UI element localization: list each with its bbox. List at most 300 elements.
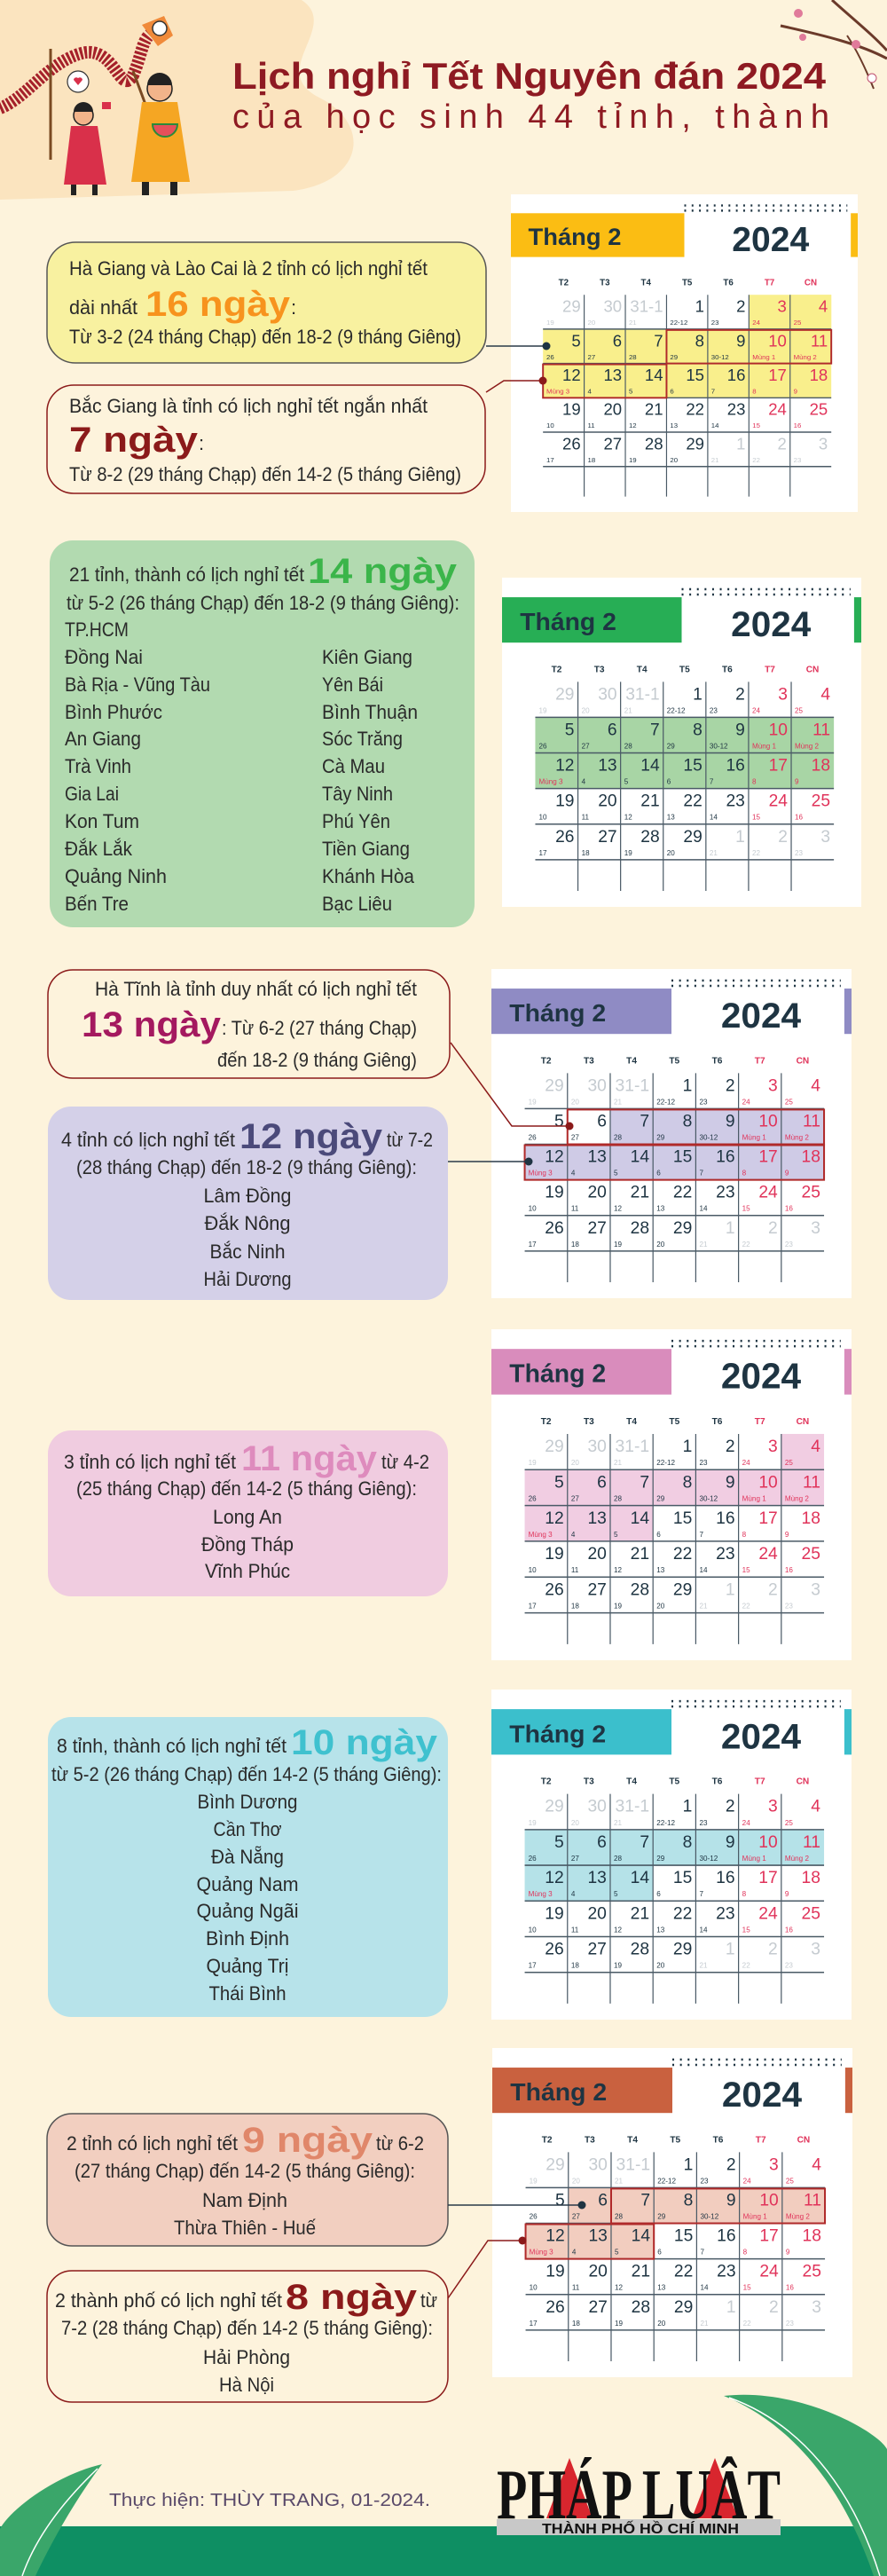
calendar 6: 29 <box>546 2155 565 2174</box>
calendar 3: T2 <box>541 1056 552 1066</box>
calendar 1: 22-12 <box>670 319 687 327</box>
calendar 2: 4 <box>582 778 586 786</box>
calendar 4: 2 <box>768 1580 778 1599</box>
calendar 1: 9 <box>794 388 797 395</box>
calendar 2: 28 <box>640 828 660 847</box>
calendar 6: 22 <box>743 2320 751 2328</box>
calendar 1: 5 <box>571 331 581 350</box>
calendar 5: 26 <box>529 1855 537 1863</box>
calendar 4: 2024 <box>721 1356 802 1397</box>
calendar 5: 9 <box>726 1833 735 1852</box>
icon: blossom branch <box>781 0 887 89</box>
calendar 5: 4 <box>811 1798 820 1816</box>
calendar 3: 11 <box>571 1205 579 1213</box>
calendar 1: 29 <box>686 434 704 453</box>
calendar 6: 19 <box>546 2263 565 2281</box>
calendar 1: 8 <box>752 388 757 395</box>
callout: 16 ngày <box>47 242 486 363</box>
callout: 13 ngày: : Từ 6-2 (27 tháng Chạp) <box>222 1017 417 1039</box>
calendar 4: 10 <box>529 1566 537 1574</box>
calendar 5: Mùng 2 <box>785 1855 809 1863</box>
calendar 4: 10 <box>758 1473 778 1492</box>
calendar 3: 24 <box>758 1184 778 1202</box>
calendar 3: 27 <box>587 1219 607 1238</box>
calendar 4: 6 <box>597 1473 607 1492</box>
calendar 4: CN <box>797 1417 809 1427</box>
calendar 3: 23 <box>785 1241 793 1249</box>
calendar 2: CN <box>806 665 819 674</box>
calendar 2: 22 <box>683 792 703 811</box>
calendar 3: 5 <box>554 1113 564 1130</box>
panel: 12 ngày: Bắc Ninh <box>209 1241 286 1263</box>
callout: 7 ngày: : <box>199 432 204 454</box>
panel: 9 ngày: (27 tháng Chạp) đến 14-2 (5 tháng Giêng): <box>75 2160 415 2182</box>
panel: 10 ngày <box>48 1717 448 2017</box>
calendar 5: 14 <box>699 1926 708 1934</box>
calendar 5: 4 <box>571 1890 576 1898</box>
calendar 4: 4 <box>571 1531 576 1539</box>
calendar 4: 13 <box>587 1509 607 1528</box>
calendar 1: 29 <box>562 297 581 316</box>
calendar 5: 1 <box>683 1798 692 1816</box>
calendar 5: T4 <box>626 1777 637 1787</box>
calendar 1: 22 <box>752 456 760 464</box>
calendar 1: 28 <box>629 353 637 361</box>
calendar 4: 17 <box>758 1509 778 1528</box>
calendar 3: 19 <box>545 1184 564 1202</box>
calendar 1: 17 <box>768 366 787 384</box>
calendar 3: 14 <box>699 1205 708 1213</box>
panel: 14 ngày: 14 ngày <box>308 552 458 591</box>
calendar 2: 11 <box>812 721 830 739</box>
calendar 1: Mùng 3 <box>546 388 569 395</box>
calendar 1: 18 <box>810 366 828 384</box>
calendar 4: 18 <box>802 1509 820 1528</box>
calendar 6: 16 <box>717 2227 736 2246</box>
calendar 3: 10 <box>758 1113 778 1130</box>
calendar 5: 2 <box>768 1941 778 1959</box>
calendar 3: 23 <box>716 1184 735 1202</box>
calendar 3: 22-12 <box>656 1098 676 1106</box>
panel: 10 ngày: Quảng Ngãi <box>197 1900 298 1922</box>
calendar 4: 19 <box>529 1459 537 1467</box>
calendar 4: 28 <box>614 1495 623 1503</box>
calendar 1: 26 <box>546 353 554 361</box>
calendar 2: 20 <box>598 792 617 811</box>
calendar 6: 10 <box>759 2192 779 2210</box>
calendar 6: 15 <box>674 2227 693 2246</box>
calendar 3: 7 <box>699 1170 703 1178</box>
calendar 3: Mùng 1 <box>742 1134 766 1142</box>
calendar 6: 20 <box>588 2263 608 2281</box>
panel: 12 ngày: Hải Dương <box>204 1268 291 1290</box>
calendar 1: 14 <box>645 366 663 384</box>
calendar 5: 18 <box>802 1869 820 1887</box>
calendar 1: Mùng 1 <box>752 353 775 361</box>
calendar 1: 4 <box>588 388 593 395</box>
calendar 5: 27 <box>571 1855 579 1863</box>
calendar 3: 20 <box>587 1184 607 1202</box>
panel: 12 ngày: 4 tỉnh có lịch nghỉ tết <box>61 1129 235 1151</box>
icon: left leaf <box>0 2464 102 2576</box>
calendar 1: 21 <box>711 456 718 464</box>
calendar 6: Mùng 3 <box>530 2249 553 2257</box>
calendar 6: 21 <box>700 2320 709 2328</box>
calendar 2: 13 <box>598 757 617 776</box>
calendar 5: 19 <box>529 1819 537 1827</box>
panel: 9 ngày: từ 6-2 <box>376 2132 424 2155</box>
calendar 6: 9 <box>726 2192 736 2210</box>
panel: 14 ngày: Khánh Hòa <box>322 865 415 887</box>
calendar 6: 2024 <box>722 2074 803 2115</box>
calendar 3: 25 <box>785 1098 793 1106</box>
panel: 9 ngày: Thừa Thiên - Huế <box>174 2217 316 2239</box>
calendar 5: T5 <box>669 1777 680 1787</box>
calendar 6: 28 <box>632 2298 650 2317</box>
calendar 5: 31-1 <box>616 1798 649 1816</box>
calendar 1: T2 <box>559 279 569 288</box>
calendar 2: 15 <box>752 814 761 822</box>
calendar 6: 31-1 <box>616 2155 650 2174</box>
panel: 12 ngày: Lâm Đồng <box>204 1185 291 1207</box>
panel: 10 ngày: Thái Bình <box>209 1982 286 2005</box>
calendar 2: 6 <box>667 778 671 786</box>
calendar 2: T2 <box>552 665 562 674</box>
calendar 5: 13 <box>656 1926 665 1934</box>
calendar 3: 15 <box>673 1148 692 1167</box>
calendar 1: 1 <box>736 434 745 453</box>
arrow: connector 9 ngày <box>448 2201 585 2210</box>
calendar 6: 22-12 <box>657 2177 677 2185</box>
calendar 5: 7 <box>699 1890 703 1898</box>
calendar 4: 7 <box>640 1473 649 1492</box>
calendar 4: 29 <box>673 1580 692 1599</box>
calendar 6: 21 <box>632 2263 650 2281</box>
calendar 3: 2 <box>768 1219 778 1238</box>
calendar 2: 1 <box>693 685 703 704</box>
calendar 6: 15 <box>743 2284 751 2292</box>
calendar 1: Tháng 2 <box>529 223 621 250</box>
panel: 10 ngày: Đà Nẵng <box>211 1846 284 1868</box>
calendar 1: 22 <box>686 400 704 419</box>
arrow: connector 12 ngày <box>448 1157 532 1166</box>
calendar 4: 8 <box>742 1531 747 1539</box>
calendar 6: 13 <box>588 2227 608 2246</box>
calendar 5: T6 <box>712 1777 723 1787</box>
calendar 1: 2024 <box>732 221 810 259</box>
calendar 3: T5 <box>669 1056 680 1066</box>
panel: 9 ngày: 2 tỉnh có lịch nghỉ tết <box>67 2132 238 2155</box>
calendar 5: 23 <box>716 1904 735 1923</box>
calendar 5: 11 <box>803 1833 820 1852</box>
panel: 14 ngày: Tiền Giang <box>322 838 410 860</box>
calendar 5: 30-12 <box>699 1855 718 1863</box>
calendar 6: Tháng 2 <box>510 2077 607 2106</box>
calendar 1: 24 <box>768 400 787 419</box>
calendar 3: 10 <box>529 1205 537 1213</box>
calendar 5: 7 <box>640 1833 649 1852</box>
panel: 14 ngày: Bến Tre <box>65 893 129 915</box>
calendar 4: 6 <box>656 1531 661 1539</box>
calendar 1: 2 <box>736 297 745 316</box>
calendar 1: 14 <box>711 421 719 429</box>
panel: 14 ngày: Phú Yên <box>322 810 390 832</box>
calendar 1: 18 <box>588 456 595 464</box>
panel: 14 ngày: Quảng Ninh <box>65 865 167 887</box>
logo: Pháp Luật: THÀNH PHỐ HỒ CHÍ MINH <box>542 2519 739 2537</box>
calendar 4: 21 <box>631 1545 649 1564</box>
calendar 2: 12 <box>624 814 632 822</box>
calendar 5: 19 <box>614 1962 623 1970</box>
calendar 6 <box>492 2048 852 2377</box>
calendar 1: 29 <box>670 353 678 361</box>
calendar 2: 5 <box>565 721 575 739</box>
calendar 4: 23 <box>785 1603 793 1611</box>
calendar 2: T7 <box>765 665 775 674</box>
calendar 5: 12 <box>545 1869 564 1887</box>
calendar 5: 8 <box>742 1890 747 1898</box>
calendar 1: T5 <box>682 279 693 288</box>
calendar 5: 1 <box>726 1941 735 1959</box>
calendar 6: 21 <box>615 2177 624 2185</box>
calendar 3: 29 <box>545 1076 564 1095</box>
calendar 2: 21 <box>710 849 718 857</box>
calendar 6: 11 <box>804 2192 821 2210</box>
calendar 6: 17 <box>530 2320 538 2328</box>
calendar 4: T3 <box>584 1417 594 1427</box>
calendar 2: Mùng 3 <box>539 778 563 786</box>
callout: 7 ngày <box>47 385 485 493</box>
callout: 16 ngày: Từ 3-2 (24 tháng Chạp) đến 18-2 (9 tháng Giêng) <box>69 326 461 348</box>
calendar 6: 24 <box>743 2177 751 2185</box>
calendar 1: 24 <box>752 319 761 327</box>
calendar 5: 10 <box>529 1926 537 1934</box>
calendar 6: 5 <box>555 2192 565 2210</box>
calendar 6: 5 <box>615 2249 619 2257</box>
calendar 3: 17 <box>758 1148 778 1167</box>
calendar 4: 23 <box>699 1459 708 1467</box>
calendar 6: 24 <box>759 2263 779 2281</box>
arrow: connector 8 ngày <box>448 2236 527 2298</box>
panel: 14 ngày: Cà Mau <box>322 755 385 777</box>
calendar 3: 29 <box>673 1219 692 1238</box>
panel: 10 ngày: Bình Dương <box>197 1791 298 1813</box>
calendar 3: T6 <box>712 1056 723 1066</box>
calendar 1: 6 <box>670 388 674 395</box>
calendar 5: 18 <box>571 1962 579 1970</box>
calendar 1: 21 <box>629 319 637 327</box>
calendar 6: 19 <box>530 2177 538 2185</box>
calendar 2: 29 <box>555 685 575 704</box>
calendar 3: 24 <box>742 1098 750 1106</box>
calendar 3: 4 <box>571 1170 576 1178</box>
calendar 4: 20 <box>587 1545 607 1564</box>
calendar 2: 23 <box>726 792 745 811</box>
panel: 12 ngày: (28 tháng Chạp) đến 18-2 (9 tháng Giêng): <box>76 1156 417 1178</box>
calendar 5: 19 <box>545 1904 564 1923</box>
calendar 4: Mùng 3 <box>529 1531 553 1539</box>
callout: 16 ngày: Hà Giang và Lào Cai là 2 tỉnh có lịch nghỉ tết <box>69 257 428 280</box>
calendar 2: T4 <box>637 665 648 674</box>
panel: 14 ngày: An Giang <box>65 728 141 750</box>
calendar 1: 26 <box>562 434 581 453</box>
calendar 6: 10 <box>530 2284 538 2292</box>
calendar 3: 21 <box>614 1098 623 1106</box>
calendar 3: 12 <box>545 1148 564 1167</box>
panel: 10 ngày: 8 tỉnh, thành có lịch nghỉ tết <box>57 1735 287 1757</box>
panel: 12 ngày: 12 ngày <box>239 1117 383 1156</box>
calendar 5: 16 <box>785 1926 793 1934</box>
calendar 4: 14 <box>631 1509 649 1528</box>
calendar 4: Mùng 2 <box>785 1495 809 1503</box>
calendar 2: 30-12 <box>710 743 728 751</box>
calendar 2: 29 <box>667 743 675 751</box>
calendar 3: 18 <box>571 1241 579 1249</box>
calendar 6: 7 <box>640 2192 650 2210</box>
callout: 16 ngày: : <box>291 296 296 319</box>
calendar 2: 24 <box>752 706 761 714</box>
calendar 5: 21 <box>631 1904 649 1923</box>
calendar 4: 29 <box>656 1495 665 1503</box>
calendar 1: 25 <box>794 319 801 327</box>
calendar 2: 20 <box>582 706 590 714</box>
arrow: connector 7 ngày <box>486 376 546 392</box>
panel: 14 ngày <box>50 540 475 927</box>
calendar 2: 28 <box>624 743 632 751</box>
calendar 6: 11 <box>572 2284 580 2292</box>
calendar 3: 17 <box>529 1241 537 1249</box>
calendar 5: 2 <box>726 1798 735 1816</box>
footer green band <box>0 2526 887 2576</box>
calendar 2: 27 <box>582 743 590 751</box>
calendar 6: 18 <box>572 2320 580 2328</box>
calendar 5: 29 <box>545 1798 564 1816</box>
calendar 4: 16 <box>716 1509 735 1528</box>
calendar 3: CN <box>797 1056 809 1066</box>
calendar 5: Mùng 3 <box>529 1890 553 1898</box>
credit text: Thực hiện: THÙY TRANG, 01-2024. <box>109 2490 430 2510</box>
calendar 3: T7 <box>755 1056 765 1066</box>
calendar 3: 31-1 <box>616 1076 649 1095</box>
calendar 1: Mùng 2 <box>794 353 817 361</box>
calendar 6: 3 <box>769 2155 779 2174</box>
calendar 1: 9 <box>736 331 745 350</box>
callout: 7 ngày: Từ 8-2 (29 tháng Chạp) đến 14-2 (5 tháng Giêng) <box>69 463 461 485</box>
panel: 10 ngày: Bình Định <box>206 1927 289 1950</box>
calendar 5: 29 <box>673 1941 692 1959</box>
calendar 3: 19 <box>529 1098 537 1106</box>
calendar 3 <box>491 969 852 1298</box>
calendar 5: 9 <box>785 1890 789 1898</box>
panel: 8 ngày: từ <box>420 2289 437 2312</box>
calendar 6: 22 <box>674 2263 693 2281</box>
calendar 6: 9 <box>786 2249 790 2257</box>
calendar 2: 9 <box>735 721 745 739</box>
icon: dragon and kids illustration <box>0 16 190 195</box>
calendar 3: 9 <box>785 1170 789 1178</box>
calendar 4: 1 <box>683 1438 692 1456</box>
calendar 6: 12 <box>615 2284 624 2292</box>
calendar 4: 1 <box>726 1580 735 1599</box>
panel: 8 ngày: Hà Nội <box>219 2374 274 2396</box>
calendar 3: 18 <box>802 1148 820 1167</box>
calendar 4: 5 <box>614 1531 618 1539</box>
calendar 1: 23 <box>794 456 801 464</box>
calendar 5: 23 <box>699 1819 708 1827</box>
calendar 6: 2 <box>769 2298 779 2317</box>
panel: 9 ngày: Nam Định <box>202 2189 287 2211</box>
calendar 1: 11 <box>588 421 595 429</box>
calendar 1: 19 <box>562 400 581 419</box>
calendar 3: 20 <box>656 1241 665 1249</box>
panel: 14 ngày: Bình Thuận <box>322 701 418 723</box>
calendar 5: 24 <box>742 1819 750 1827</box>
calendar 2: 27 <box>598 828 617 847</box>
calendar 1: 25 <box>810 400 828 419</box>
calendar 4: 9 <box>785 1531 789 1539</box>
calendar 3: 15 <box>742 1205 750 1213</box>
panel: 10 ngày: 10 ngày <box>291 1723 438 1762</box>
panel: 14 ngày: Trà Vinh <box>65 755 131 777</box>
calendar 3: 5 <box>614 1170 618 1178</box>
calendar 2: 29 <box>683 828 703 847</box>
calendar 3: Mùng 3 <box>529 1170 553 1178</box>
calendar 1: 8 <box>695 331 704 350</box>
panel: 14 ngày: 21 tỉnh, thành có lịch nghỉ tết <box>69 563 304 586</box>
calendar 5: 27 <box>587 1941 607 1959</box>
calendar 3: 27 <box>571 1134 579 1142</box>
calendar 3: 13 <box>587 1148 607 1167</box>
calendar 5: 22-12 <box>656 1819 676 1827</box>
calendar 6: 1 <box>684 2155 693 2174</box>
header illustration blob <box>0 0 354 200</box>
calendar 6: 20 <box>657 2320 666 2328</box>
calendar 3: 12 <box>614 1205 623 1213</box>
calendar 2: 2 <box>778 828 788 847</box>
panel: 14 ngày: từ 5-2 (26 tháng Chạp) đến 18-2 (9 tháng Giêng): <box>67 592 459 614</box>
callout: 7 ngày: Bắc Giang là tỉnh có lịch nghỉ tết ngắn nhất <box>69 395 428 417</box>
callout: 13 ngày: đến 18-2 (9 tháng Giêng) <box>217 1049 417 1071</box>
calendar 3: 7 <box>640 1113 649 1130</box>
calendar 2: Mùng 1 <box>752 743 776 751</box>
calendar 6: Mùng 2 <box>786 2213 810 2221</box>
panel: 8 ngày: Hải Phòng <box>203 2346 290 2368</box>
calendar 4: T4 <box>626 1417 637 1427</box>
calendar 4: 15 <box>742 1566 750 1574</box>
panel: 14 ngày: Tây Ninh <box>322 783 393 805</box>
calendar 5: CN <box>797 1777 809 1787</box>
calendar 1: 12 <box>562 366 581 384</box>
panel: 14 ngày: Yên Bái <box>322 674 383 696</box>
callout: 13 ngày: Hà Tĩnh là tỉnh duy nhất có lịch nghỉ tết <box>95 978 417 1000</box>
calendar 2: 23 <box>710 706 718 714</box>
calendar 1: 1 <box>695 297 704 316</box>
calendar 4: 26 <box>529 1495 537 1503</box>
calendar 2: 19 <box>539 706 547 714</box>
callout: 13 ngày: 13 ngày <box>82 1005 222 1044</box>
calendar 2: T5 <box>679 665 690 674</box>
calendar 1: 21 <box>645 400 663 419</box>
panel: 8 ngày <box>47 2271 448 2402</box>
calendar 6: 26 <box>530 2213 538 2221</box>
calendar 3: 3 <box>768 1076 778 1095</box>
calendar 4: 18 <box>571 1603 579 1611</box>
calendar 6: T3 <box>585 2135 595 2145</box>
calendar 2: 17 <box>539 849 547 857</box>
calendar 4: 17 <box>529 1603 537 1611</box>
calendar 5: 29 <box>656 1855 665 1863</box>
calendar 6: 23 <box>717 2263 736 2281</box>
